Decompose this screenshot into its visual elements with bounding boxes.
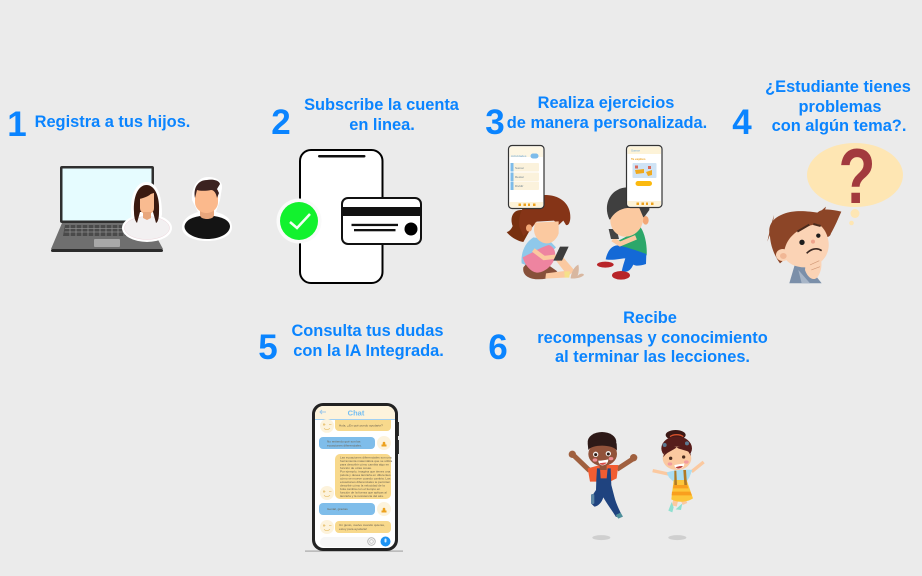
heading step 6: Recibe [623,309,677,327]
chat input [320,536,390,547]
phone screen: activities menu: Actividades [511,154,527,158]
chat messages: Hola, ¿En qué puedo ayudarte? [339,424,383,428]
heading step 2: en linea. [349,116,415,134]
chat messages: Las ecuaciones diferenciales son una [340,456,392,460]
chat messages: lanzarla y la resistencia del aire. [340,494,384,498]
chat messages: función de otras cosas. [340,466,372,470]
number 1: 1 [7,105,27,144]
icon: father avatar [182,177,232,241]
number 6: 6 [488,328,508,367]
step 4: student has problems [732,78,911,283]
heading step 4: con algún tema?. [772,117,906,135]
chat messages: Un gusto, vuelve cuando quieras, [339,523,385,527]
step 2: subscribe online [271,96,460,283]
chat header [315,406,395,420]
chat messages: No entiendo qué son las [327,440,361,444]
icon: smartphone outline [300,150,382,283]
step 5: integrated AI chat [258,322,444,552]
heading step 4: problemas [799,98,881,116]
heading step 6: al terminar las lecciones. [555,348,750,366]
step 6: rewards and knowledge [488,309,768,540]
chat messages: Por ejemplo, imagina que tienes una [340,470,390,474]
heading step 6: recompensas y conocimiento [537,329,768,347]
phone screen: exercise: Sumar [631,148,640,152]
illustration: jumping boy [569,432,637,540]
phone screen: activities menu: Dividir [515,184,523,188]
question mark: ? [838,133,876,220]
chat messages: para describir cómo cambia algo en [340,462,389,466]
number 3: 3 [485,103,505,142]
heading step 5: Consulta tus dudas [291,322,444,340]
heading step 3: Realiza ejercicios [538,94,674,112]
illustration: girl with phone [507,195,584,279]
illustration: thinking boy [767,207,841,283]
phone screen: exercise: Te explico [631,157,646,161]
phone screen: activities menu: Sumar [515,166,524,170]
chat messages: ecuaciones diferenciales te permiten [340,480,390,484]
phone screen: exercise [626,146,662,208]
heading step 1: Registra a tus hijos. [35,113,190,131]
chat header: Chat [348,408,365,418]
chat messages: Genial, gracias [327,507,348,511]
icon: mother avatar [122,182,172,242]
chat messages: ecuaciones diferenciales. [327,444,362,448]
chat messages: cómo se mueve cuando cambia. Las [340,476,391,480]
chat messages: función de la fuerza que aplicas al [340,490,387,494]
heading step 3: de manera personalizada. [507,114,707,132]
chat messages: pelota y desea lanzarla en diferentes [340,473,391,477]
chat messages: estoy para ayudarte! [339,527,367,531]
chat messages: describir cómo la velocidad de la [340,484,385,488]
number 4: 4 [732,103,752,142]
thought bubble [807,133,903,225]
phone screen: activities menu: Restar [515,175,524,179]
phone screen: activities menu [508,146,544,208]
step 3: personalised exercises [485,94,707,280]
chat messages [319,419,393,534]
chat messages: bola cambia con el tiempo en [340,487,381,491]
heading step 4: ¿Estudiante tienes [765,78,911,96]
phone: chat screen [305,403,403,552]
illustration: boy with phone [597,187,650,280]
heading step 5: con la IA Integrada. [293,342,444,360]
number 5: 5 [258,328,278,367]
icon: laptop [51,166,163,252]
chat messages: herramienta matemática que se utiliza [340,459,393,463]
number 2: 2 [271,103,291,142]
step 1: register your children [7,105,232,252]
illustration: jumping girl [653,430,704,540]
icon: credit card [342,198,421,244]
heading step 2: Subscribe la cuenta [304,96,460,114]
icon: green check [276,198,322,244]
